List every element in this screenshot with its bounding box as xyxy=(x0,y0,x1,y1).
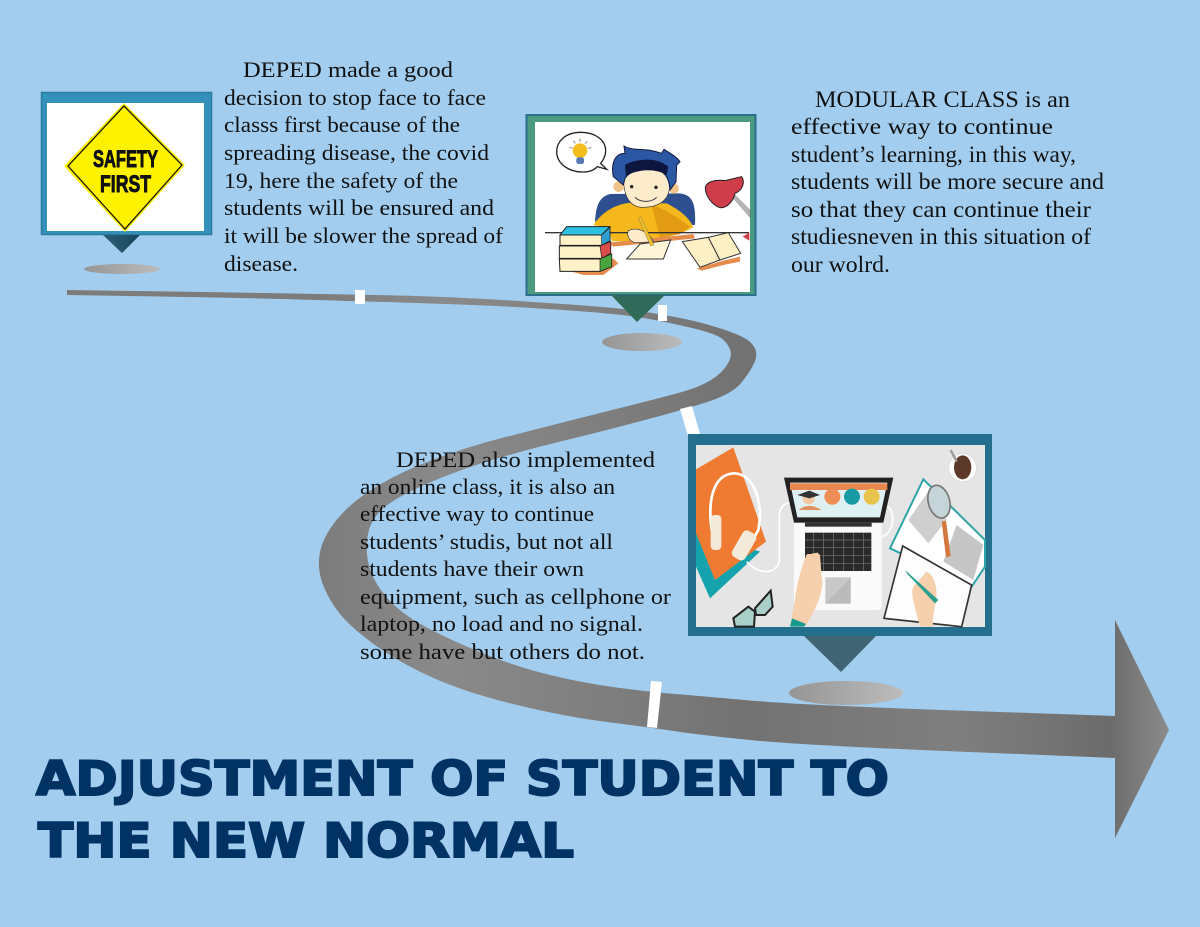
marker 2: student studying image frame xyxy=(526,115,756,295)
text block: DEPED decision: disease. xyxy=(224,251,298,276)
pointer 1 xyxy=(103,235,140,253)
text block: DEPED decision xyxy=(224,57,504,276)
text block: modular class: student’s learning, in this way, xyxy=(791,142,1076,167)
text block: DEPED decision: classs first because of the xyxy=(224,112,460,137)
text block: online class: students’ studis, but not all xyxy=(360,529,613,554)
shadow 2 xyxy=(602,333,682,351)
text block: online class xyxy=(360,447,672,664)
shadow 3 xyxy=(789,681,903,705)
title: ADJUSTMENT OF STUDENT TO xyxy=(36,752,889,807)
text block: modular class: students will be more secure and xyxy=(791,169,1105,194)
text block: DEPED decision: 19, here the safety of the xyxy=(224,168,458,193)
text block: online class: DEPED also implemented xyxy=(396,447,655,472)
text block: online class: students have their own xyxy=(360,556,584,581)
icon: safety first diamond sign: SAFETY xyxy=(93,146,158,173)
title: THE NEW NORMAL xyxy=(38,814,574,869)
text block: DEPED decision: DEPED made a good xyxy=(243,57,453,82)
text block: modular class: our wolrd. xyxy=(791,252,890,277)
text block: online class: some have but others do not. xyxy=(360,639,645,664)
tick mark on road near marker 2 xyxy=(658,305,667,321)
icon: safety first diamond sign: FIRST xyxy=(100,171,151,198)
title xyxy=(36,752,889,869)
text block: online class: equipment, such as cellphone or xyxy=(360,584,672,609)
text block: DEPED decision: students will be ensured and xyxy=(224,195,494,220)
text block: modular class: so that they can continue their xyxy=(791,197,1091,222)
marker 3: online class image frame xyxy=(688,434,992,636)
icon: safety first diamond sign xyxy=(64,103,185,232)
illustration: boy studying at desk xyxy=(545,132,750,275)
timeline road arrow xyxy=(67,290,1169,838)
shadow 1 xyxy=(84,264,160,274)
text block: modular class: effective way to continue xyxy=(791,114,1053,139)
text block: online class: an online class, it is also an xyxy=(360,474,615,499)
text block: online class: effective way to continue xyxy=(360,501,594,526)
text block: DEPED decision: it will be slower the spread of xyxy=(224,223,504,248)
text block: DEPED decision: decision to stop face to face xyxy=(224,85,486,110)
text block: modular class xyxy=(791,87,1105,277)
text block: modular class: MODULAR CLASS is an xyxy=(815,87,1071,112)
text block: online class: laptop, no load and no signal. xyxy=(360,611,643,636)
text block: DEPED decision: spreading disease, the covid xyxy=(224,140,489,165)
marker 1: safety first image frame xyxy=(42,92,212,234)
pointer 3 xyxy=(804,636,876,672)
illustration: laptop on desk xyxy=(696,447,985,627)
text block: modular class: studiesneven in this situation of xyxy=(791,224,1091,249)
pointer 2 xyxy=(611,295,665,322)
